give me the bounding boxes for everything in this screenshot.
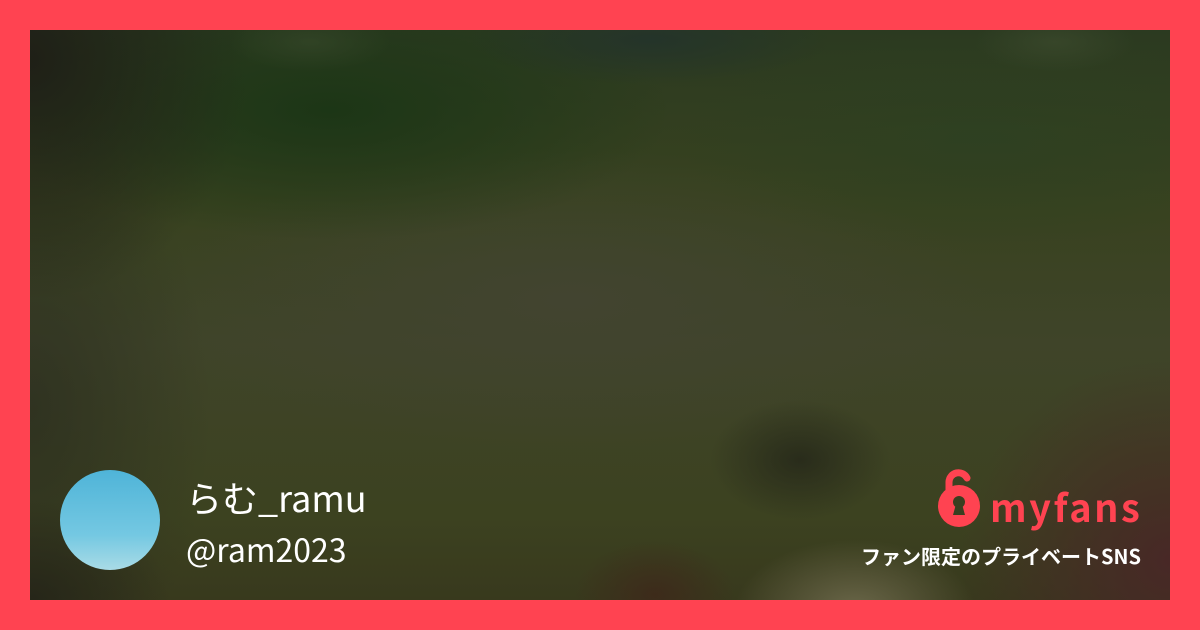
logo wordmark: myfans (990, 478, 1142, 533)
user handle: @ram2023 (186, 526, 347, 572)
display name: らむ_ramu (186, 471, 367, 523)
icon: myfans open padlock logo (938, 469, 980, 527)
tagline: ファン限定のプライベートSNS (861, 541, 1141, 570)
avatar: neutral placeholder circle (60, 470, 160, 570)
